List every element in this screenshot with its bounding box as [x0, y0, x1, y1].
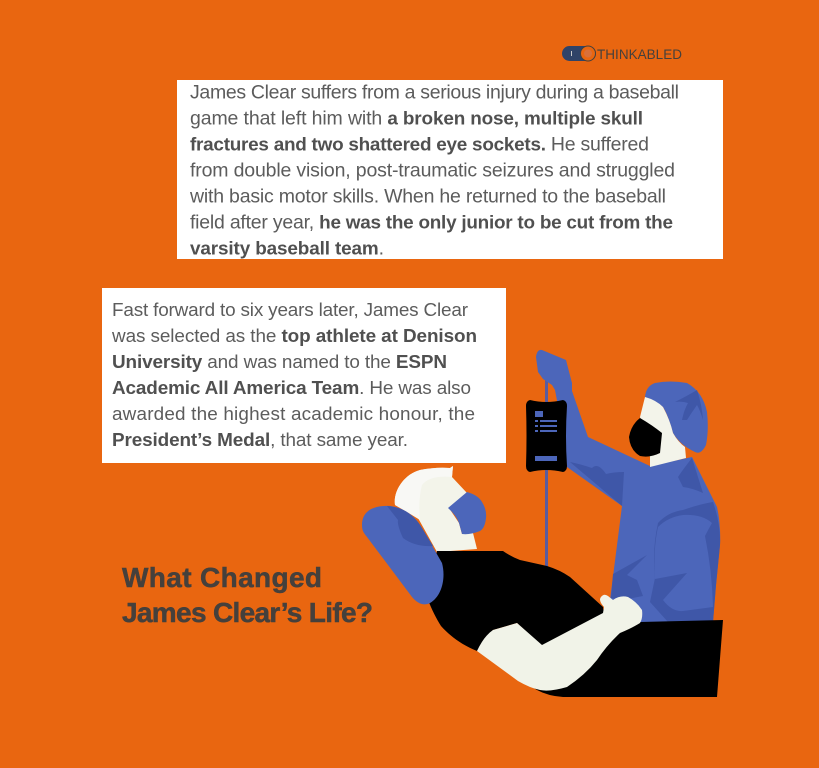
text block: the injury [177, 80, 723, 260]
text block: the injury: James Clear suffers from a serious injury during a baseball [190, 82, 679, 104]
title [122, 562, 373, 628]
text block: the injury: with basic motor skills. When he returned to the baseball [189, 186, 666, 208]
patient shirt [428, 551, 605, 651]
IV pole [545, 376, 548, 570]
face mask [629, 418, 662, 457]
title: James Clear’s Life? [122, 597, 373, 628]
patient arm [477, 595, 642, 691]
surgical cap [645, 382, 708, 453]
pillow [362, 506, 444, 604]
text block: six years later: President’s Medal, that same year. [112, 430, 408, 451]
face [640, 397, 686, 467]
text block: the injury: from double vision, post-traumatic seizures and struggled [190, 160, 675, 182]
text block: the injury: varsity baseball team. [190, 238, 384, 260]
patient mask [448, 492, 486, 534]
text block: the injury: field after year, he was the only junior to be cut from the [190, 212, 673, 234]
title: What Changed [122, 562, 322, 593]
logo: Thinkabled: THINKABLED [597, 47, 682, 62]
logo: Thinkabled [562, 46, 682, 62]
text block: six years later: Fast forward to six years later, James Clear [112, 300, 468, 321]
illustration: doctor and patient [362, 350, 723, 697]
torso shadow [650, 502, 720, 622]
doctor [536, 350, 720, 624]
shoulder shadow [678, 458, 703, 493]
text block: six years later: was selected as the top athlete at Denison [111, 326, 477, 347]
front fold shadow [611, 555, 647, 600]
text block: six years later [102, 288, 506, 463]
chair base [520, 620, 723, 697]
text block: six years later: awarded the highest academic honour, the [112, 404, 475, 425]
text block: the injury: game that left him with a broken nose, multiple skull [190, 108, 643, 130]
text block: six years later: University and was named to the ESPN [112, 352, 447, 373]
sleeve shadow [570, 462, 624, 506]
IV bag [526, 400, 567, 472]
text block: six years later: Academic All America Team. He was also [112, 378, 471, 399]
text block: the injury: fractures and two shattered eye sockets. He suffered [190, 134, 649, 156]
patient head [395, 466, 486, 552]
